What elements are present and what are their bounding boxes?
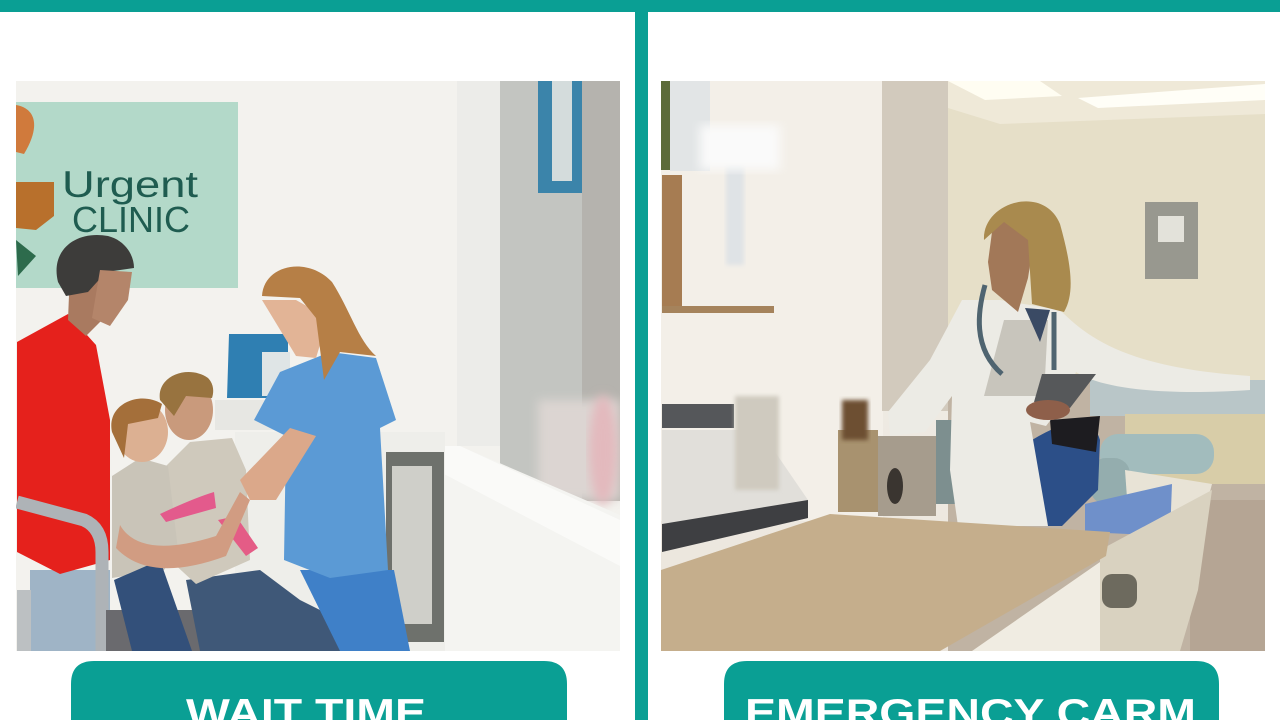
woman and child seated (106, 372, 340, 651)
counter foreground (661, 396, 1110, 651)
exam bed background (1085, 380, 1265, 651)
centre teal divider (635, 0, 648, 720)
nurse in blue (240, 266, 410, 651)
photo: urgent clinic waiting room (16, 81, 620, 651)
clinic sign: Urgent (62, 164, 199, 205)
top teal bar (0, 0, 1280, 12)
label: wait time (71, 661, 567, 720)
clinic sign: CLINIC (72, 199, 190, 240)
clinic sign (16, 102, 238, 288)
photo: exam room with doctor (660, 81, 1265, 651)
label: emergency care (724, 661, 1219, 720)
doctor (888, 201, 1250, 526)
man in red (17, 235, 134, 651)
rail (17, 502, 102, 651)
monitor (227, 334, 288, 398)
